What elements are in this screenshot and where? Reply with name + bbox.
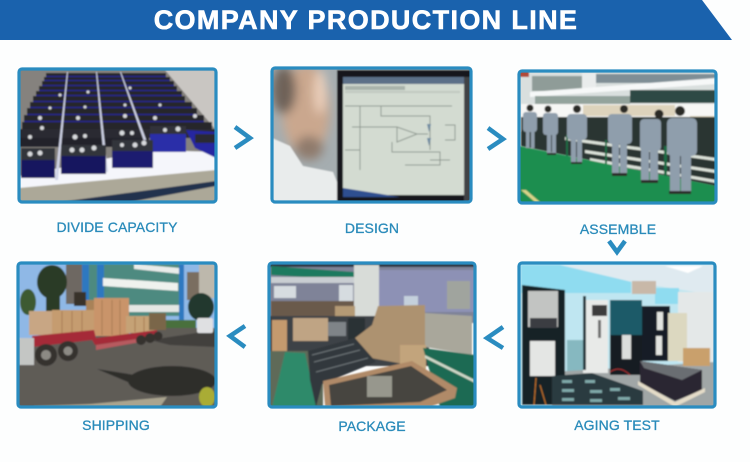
boxes left (272, 320, 287, 351)
workers (523, 112, 697, 192)
car (197, 318, 213, 333)
air conditioner (583, 300, 608, 373)
panel: design photo (272, 64, 471, 202)
arrow: to assemble (488, 128, 503, 149)
panel: divide capacity photo (19, 69, 216, 202)
separators (55, 72, 150, 180)
label: shipping: SHIPPING (82, 417, 150, 433)
panel: shipping photo (18, 263, 216, 407)
wrapped pallets (425, 313, 472, 355)
trailer (32, 330, 157, 347)
arrow: to shipping (230, 326, 245, 347)
front batteries (21, 148, 55, 160)
schematic (345, 106, 455, 170)
floor (519, 146, 716, 203)
panel: aging test photo (519, 263, 715, 407)
bush (199, 387, 215, 407)
rack line (521, 117, 716, 186)
crate (323, 361, 457, 406)
lower tray (60, 181, 216, 202)
wheels (35, 332, 162, 366)
label: divide capacity: DIVIDE CAPACITY (56, 219, 178, 235)
arrow: to design (235, 127, 250, 148)
label: assemble: ASSEMBLE (580, 221, 656, 237)
tan stack (355, 305, 425, 368)
label: package: PACKAGE (338, 418, 406, 434)
racks (610, 300, 642, 335)
label: design: DESIGN (345, 220, 399, 236)
panel: assemble photo (519, 71, 716, 203)
arrow: to package (487, 327, 503, 348)
terminals (28, 86, 197, 156)
arrow: to aging test (609, 241, 625, 252)
cabinet (522, 285, 565, 405)
floors (269, 351, 323, 407)
dark batteries (308, 338, 376, 407)
battery rows (22, 73, 212, 129)
header banner (0, 0, 732, 40)
battery bank (640, 361, 702, 401)
cargo (74, 292, 86, 306)
title: COMPANY PRODUCTION LINE (154, 5, 578, 35)
panel: package photo (269, 263, 475, 407)
label: aging test: AGING TEST (574, 417, 660, 433)
